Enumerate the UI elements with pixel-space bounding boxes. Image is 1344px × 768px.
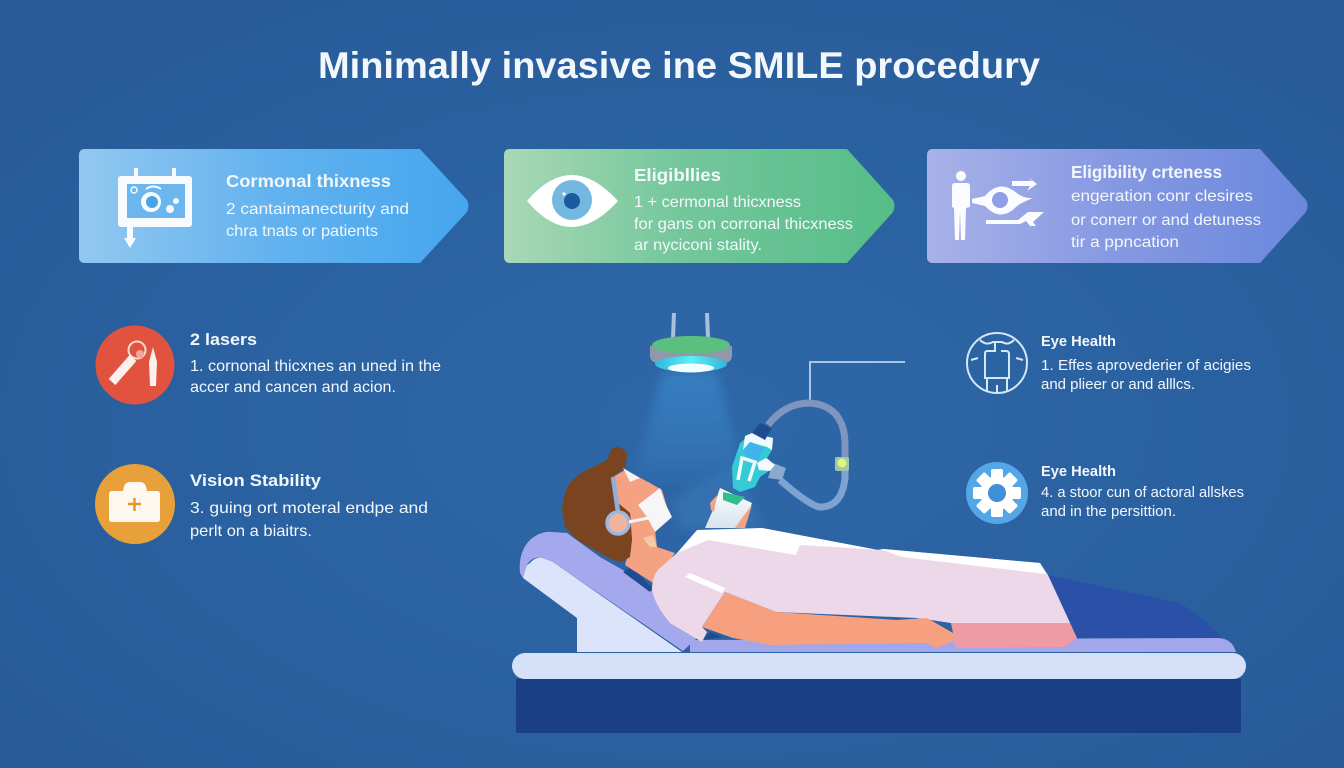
panel: eligibilities: 1 + cermonal thicxness <box>634 194 801 211</box>
item: vision stability: perlt on a biaitrs. <box>190 523 312 540</box>
patient <box>562 447 1077 648</box>
panel: cormonal thixness: Cormonal thixness <box>226 171 391 191</box>
item: 2 lasers: 2 lasers <box>190 331 257 349</box>
item: vision stability: Vision Stability <box>190 472 322 490</box>
item: eye health outline <box>967 333 1251 393</box>
hand-held device <box>705 488 752 528</box>
eye patch <box>623 468 640 482</box>
head support <box>523 558 682 652</box>
panel: cormonal thixness <box>79 149 468 263</box>
item: vision stability <box>95 464 428 544</box>
hair <box>562 447 632 562</box>
item: 2 lasers: 1. cornonal thicxnes an uned in the <box>190 358 441 375</box>
face mask <box>638 488 672 532</box>
panel: eligibility criteria: Eligibility crteness <box>1071 162 1222 182</box>
headset <box>607 477 648 534</box>
panel: eligibilities: for gans on corronal thicxness <box>634 216 853 233</box>
item: eye health gear <box>966 462 1244 524</box>
gown <box>652 528 1077 642</box>
item: 2 lasers <box>96 326 441 404</box>
title: Minimally invasive ine SMILE procedury <box>318 45 1040 86</box>
pillow <box>520 532 697 651</box>
blue blanket <box>1048 575 1222 638</box>
item: eye health gear: and in the persittion. <box>1041 504 1176 520</box>
callout line <box>810 362 905 403</box>
lower gown pink <box>951 623 1077 648</box>
item: eye health outline: Eye Health <box>1041 334 1116 350</box>
mattress <box>690 638 1236 652</box>
arm <box>702 592 956 648</box>
icon: body outline <box>967 333 1027 393</box>
navy collar gap <box>623 567 652 592</box>
icon: eye <box>527 175 618 227</box>
bed top <box>512 653 1246 679</box>
panel: eligibility criteria <box>927 149 1308 263</box>
neck and face <box>613 470 675 583</box>
chin highlight <box>643 535 657 547</box>
item: vision stability: 3. guing ort moteral endpe and <box>190 500 428 517</box>
item: eye health outline: and plieer or and alllcs. <box>1041 377 1195 393</box>
panel: eligibilities: Eligibllies <box>634 165 721 185</box>
gown highlight <box>677 528 1046 574</box>
icon: eye scanner device <box>118 168 192 248</box>
panel: eligibilities <box>504 149 894 263</box>
handpiece glow <box>672 465 765 530</box>
handpiece <box>732 423 775 492</box>
item: eye health gear: 4. a stoor cun of actoral allskes <box>1041 485 1244 501</box>
panel: cormonal thixness: chra tnats or patients <box>226 223 378 240</box>
item: eye health outline: 1. Effes aprovederier of acigies <box>1041 358 1251 374</box>
panel: eligibility criteria: or conerr or and detuness <box>1071 212 1261 229</box>
navy under sleeve <box>703 632 723 640</box>
icon: laser tools <box>96 326 174 404</box>
surgical lamp <box>650 313 732 372</box>
item: eye health gear: Eye Health <box>1041 464 1116 480</box>
icon: person and eye flow <box>952 171 1044 240</box>
panel: eligibilities: ar nyciconi stality. <box>634 237 762 254</box>
panel: eligibility criteria: engeration conr clesires <box>1071 188 1253 205</box>
lamp beam <box>630 372 742 490</box>
icon: gear <box>966 462 1028 524</box>
laser tube <box>768 403 849 507</box>
bed base <box>516 679 1241 733</box>
panel: eligibility criteria: tir a ppncation <box>1071 234 1179 251</box>
panel: cormonal thixness: 2 cantaimanecturity and <box>226 201 409 218</box>
item: 2 lasers: accer and cancen and acion. <box>190 379 396 396</box>
illustration: SMILE procedure scene <box>512 313 1246 733</box>
icon: medical case <box>95 464 175 544</box>
sleeve stripe <box>685 573 725 593</box>
